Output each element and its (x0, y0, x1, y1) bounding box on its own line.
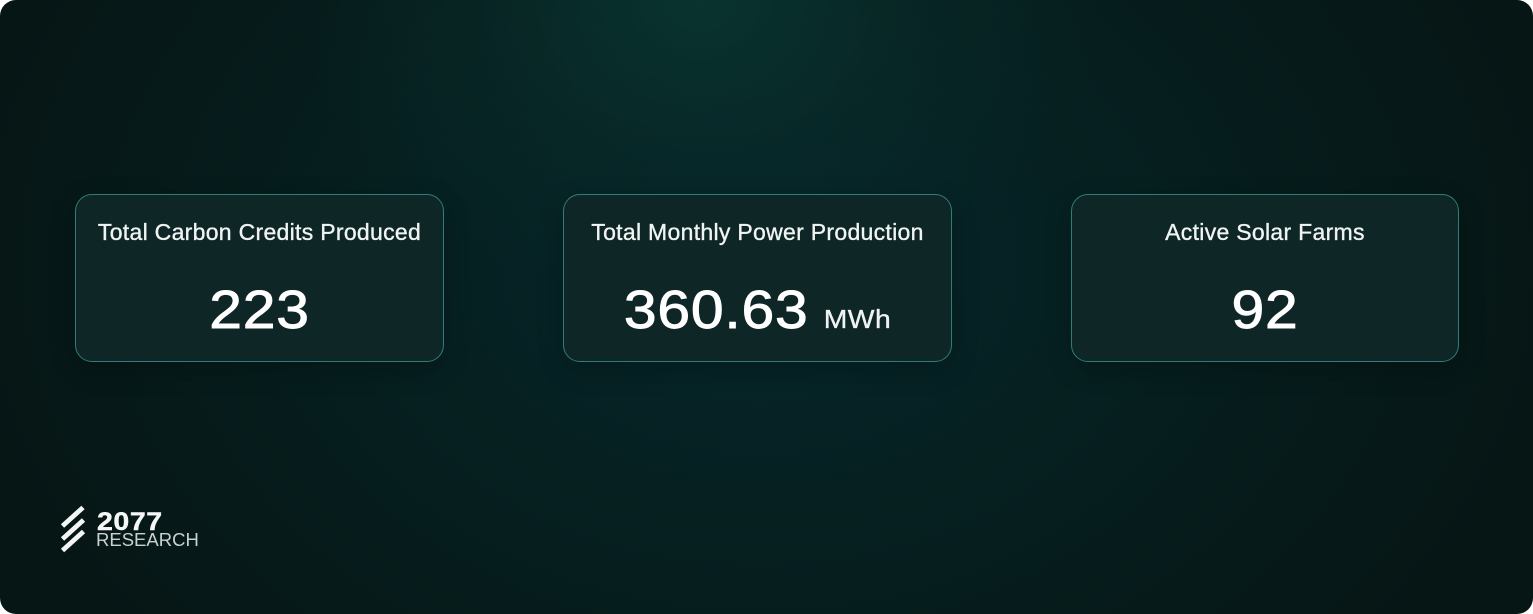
value: 360.63 MWh: 360.63 MWh (624, 280, 891, 340)
label: monthly power production: Total Monthly Power Production (591, 219, 924, 245)
value: 223: 223 (209, 280, 310, 340)
logo: 2077 Research (60, 506, 199, 552)
logo text: research: RESEARCH (96, 529, 199, 550)
card: monthly power production (563, 194, 952, 362)
label: total carbon credits: Total Carbon Credits Produced (98, 219, 421, 245)
value: 92: 92 (1231, 280, 1299, 340)
icon: logo stripes (60, 506, 86, 552)
label: active solar farms: Active Solar Farms (1165, 219, 1365, 245)
card: total carbon credits (75, 194, 444, 362)
logo text: 2077: 2077 (97, 508, 163, 536)
card: active solar farms (1071, 194, 1459, 362)
